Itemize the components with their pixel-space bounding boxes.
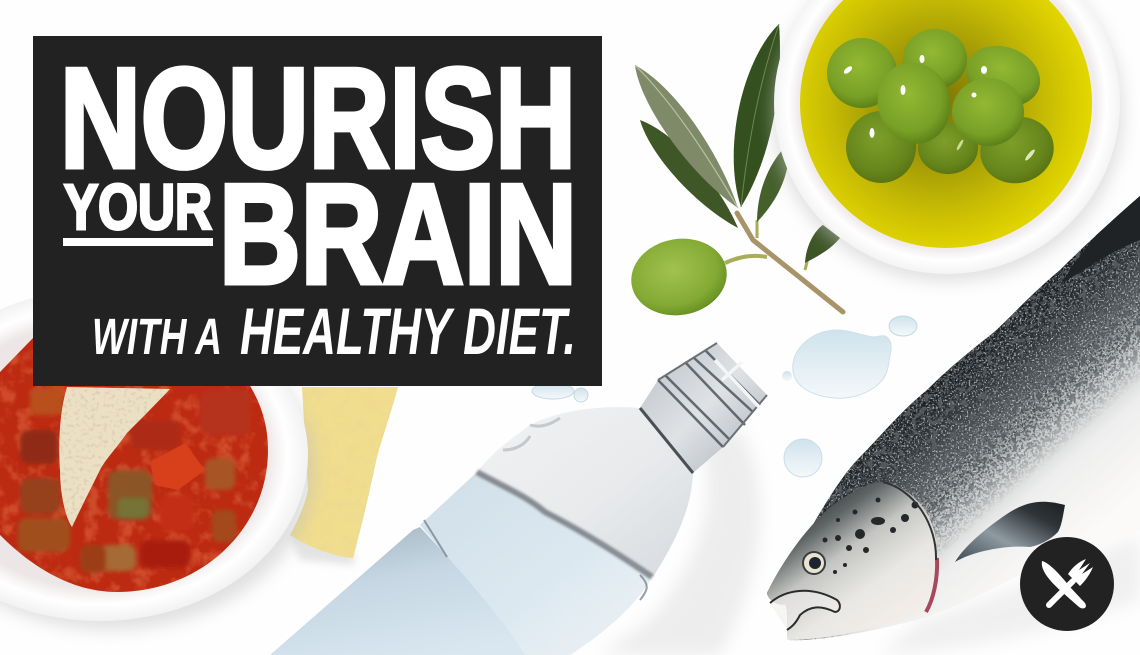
olive fruit: [625, 231, 733, 323]
subheading: with a: WITH A: [92, 308, 222, 365]
back scales and speckles: [760, 190, 1140, 655]
olive oil: [800, 0, 1092, 248]
leaf: lower dark: [640, 120, 738, 228]
lower water band: [270, 527, 525, 655]
big drop: [793, 330, 891, 398]
fish body: [760, 190, 1140, 655]
bowl shadow: [772, 0, 1124, 282]
branch stem: [737, 213, 843, 312]
small drops: [889, 316, 917, 336]
heading: your: YOUR: [64, 171, 212, 243]
subheading: healthy diet: HEALTHY DIET.: [240, 294, 576, 368]
bowl shadow: [0, 310, 315, 630]
mouth: [770, 591, 840, 630]
salmon: [760, 190, 1140, 655]
bowl of olive oil with olives: [772, 0, 1124, 282]
water section: [420, 472, 652, 655]
fish head: [767, 482, 937, 640]
dark back ridge: [1060, 190, 1140, 285]
badge circle: [1020, 537, 1114, 631]
water bottle: [270, 343, 767, 655]
water line: [477, 472, 652, 577]
water drops: [532, 316, 917, 477]
olive stem: [725, 256, 767, 263]
salsa: [0, 335, 268, 592]
heading: brain: BRAIN: [219, 155, 577, 314]
bowl rim: [0, 289, 308, 621]
pectoral fin: [955, 502, 1065, 562]
salsa chunks: [18, 387, 250, 573]
icon: fork and knife badge: [1020, 537, 1114, 631]
bottle neck: [640, 343, 767, 473]
leaf: upper dark: [734, 24, 780, 207]
knife: [1042, 561, 1086, 608]
leaf: small right: [757, 142, 790, 222]
title panel: [33, 36, 602, 386]
underline: [63, 238, 213, 246]
yellow tortilla chip: [285, 385, 400, 565]
bottle shadow: [600, 430, 760, 655]
olive branch: [625, 24, 843, 323]
eye: [803, 552, 825, 574]
gill edge: [883, 482, 936, 560]
upper air section: [477, 407, 693, 577]
leaf: silver: [635, 65, 738, 208]
leaf: small lower: [805, 225, 840, 263]
chip in salsa: [59, 387, 170, 527]
fish shadow: [880, 535, 1140, 655]
salsa bowl with chips: [0, 289, 400, 630]
panel background: [33, 36, 602, 386]
heading: nourish: NOURISH: [60, 39, 576, 198]
bowl rim: [774, 0, 1120, 274]
olives: [827, 29, 1061, 191]
fork: [1049, 559, 1093, 605]
head spots: [822, 498, 918, 574]
gill red line: [926, 558, 937, 612]
small stems: [757, 220, 808, 270]
